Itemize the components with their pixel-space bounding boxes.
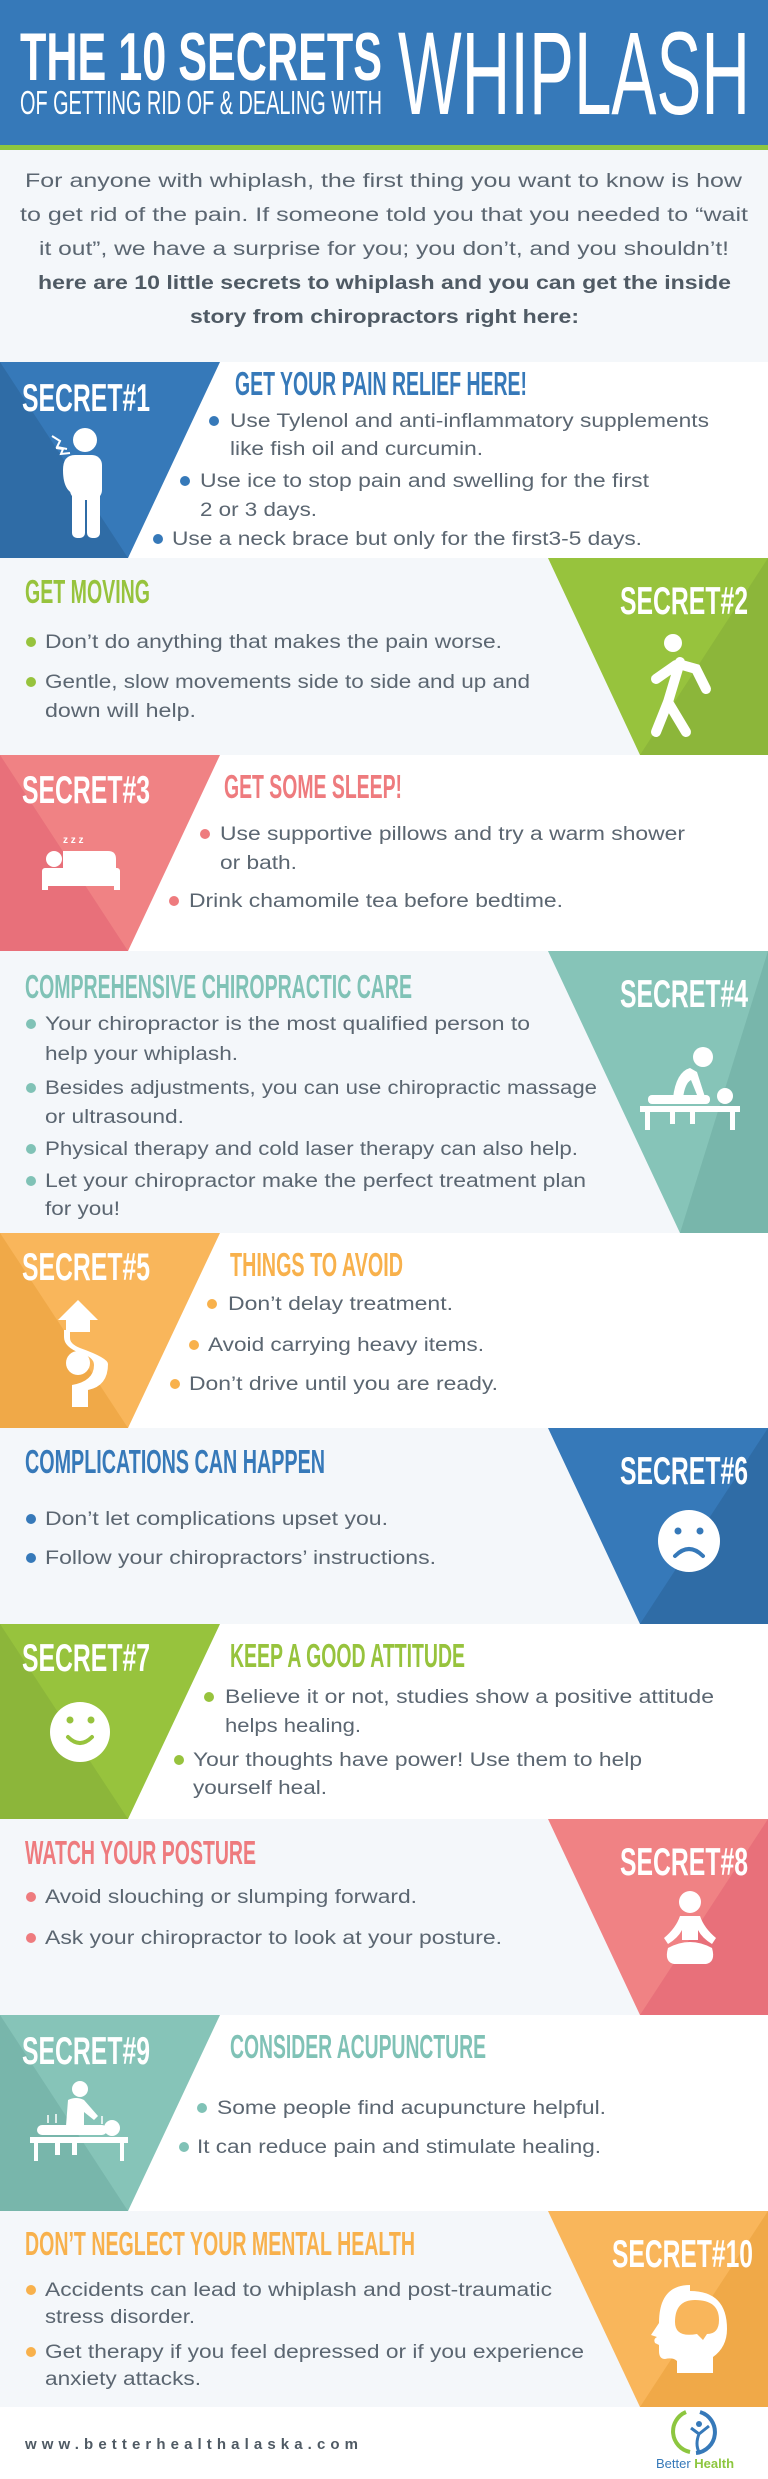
- header banner: [0, 0, 768, 150]
- icon: person with neck pain: [52, 428, 102, 538]
- panel: secret 6: [0, 1428, 768, 1624]
- panel: secret 3: [0, 755, 768, 951]
- panel: secret 1: Use a neck brace but only for the first3-5 days.: [172, 529, 642, 550]
- panel: secret 9: [0, 2015, 768, 2211]
- panel: secret 10: DON’T NEGLECT YOUR MENTAL HEALTH: [25, 2225, 415, 2262]
- panel: secret 4: Your chiropractor is the most qualified person to: [45, 1014, 530, 1035]
- intro text: story from chiropractors right here:: [190, 307, 579, 328]
- panel: secret 7: SECRET#7: [22, 1637, 150, 1680]
- icon: bed with sleeping person: z z z: [63, 835, 84, 846]
- panel: secret 9: CONSIDER ACUPUNCTURE: [230, 2028, 486, 2065]
- panel: secret 5: Don’t delay treatment.: [228, 1294, 453, 1315]
- panel: secret 9: It can reduce pain and stimulate healing.: [197, 2137, 601, 2158]
- panel: secret 3: or bath.: [220, 853, 297, 874]
- panel: secret 6: Follow your chiropractors’ instructions.: [45, 1548, 436, 1569]
- panel: secret 6: COMPLICATIONS CAN HAPPEN: [25, 1443, 325, 1480]
- intro text: here are 10 little secrets to whiplash and you can get the inside: [38, 273, 731, 294]
- panel: secret 5: [0, 1233, 768, 1428]
- panel: secret 5: SECRET#5: [22, 1246, 150, 1289]
- panel: secret 4: Physical therapy and cold laser therapy can also help.: [45, 1139, 578, 1160]
- panel: secret 9: Some people find acupuncture helpful.: [217, 2098, 606, 2119]
- panel: secret 4: or ultrasound.: [45, 1107, 184, 1128]
- icon: acupuncture: [30, 2081, 128, 2161]
- panel: secret 1: Use Tylenol and anti-inflammatory supplements: [230, 411, 709, 432]
- panel: secret 5: Avoid carrying heavy items.: [208, 1335, 484, 1356]
- panel: secret 10: anxiety attacks.: [45, 2369, 201, 2390]
- panel: secret 8: Ask your chiropractor to look at your posture.: [45, 1928, 502, 1949]
- panel: secret 4: help your whiplash.: [45, 1044, 238, 1065]
- panel: secret 4: COMPREHENSIVE CHIROPRACTIC CARE: [25, 968, 412, 1005]
- panel: secret 7: Believe it or not, studies show a positive attitude: [225, 1687, 714, 1708]
- panel: secret 7: yourself heal.: [193, 1778, 327, 1799]
- icon: head with brain: [651, 2285, 727, 2373]
- panel: secret 1: like fish oil and curcumin.: [230, 439, 483, 460]
- panel: secret 1: GET YOUR PAIN RELIEF HERE!: [235, 365, 527, 402]
- intro text: For anyone with whiplash, the first thing you want to know is how: [25, 171, 742, 192]
- panel: secret 7: Your thoughts have power! Use them to help: [193, 1750, 642, 1771]
- panel: secret 7: helps healing.: [225, 1716, 361, 1737]
- panel: secret 5: Don’t drive until you are ready.: [189, 1374, 498, 1395]
- panel: secret 8: Avoid slouching or slumping forward.: [45, 1887, 417, 1908]
- title: the 10 secrets: THE 10 SECRETS: [20, 19, 382, 95]
- panel: secret 1: [0, 362, 768, 558]
- intro text: it out”, we have a surprise for you; you don’t, and you shouldn’t!: [39, 239, 729, 260]
- icon: bed with sleeping person: [42, 835, 120, 890]
- panel: secret 10: stress disorder.: [45, 2307, 195, 2328]
- intro text: to get rid of the pain. If someone told you that you needed to “wait: [20, 205, 749, 226]
- icon: meditating person: [664, 1891, 716, 1964]
- panel: secret 2: GET MOVING: [25, 573, 150, 610]
- panel: secret 1: 2 or 3 days.: [200, 500, 317, 521]
- panel: secret 7: KEEP A GOOD ATTITUDE: [230, 1637, 465, 1674]
- panel: secret 8: WATCH YOUR POSTURE: [25, 1834, 256, 1871]
- icon: sad face: [658, 1510, 720, 1572]
- panel: secret 10: Accidents can lead to whiplash and post-traumatic: [45, 2280, 552, 2301]
- panel: secret 3: GET SOME SLEEP!: [224, 768, 402, 805]
- logo: better health: [656, 2412, 734, 2471]
- panel: secret 2: Gentle, slow movements side to side and up and: [45, 672, 530, 693]
- panel: secret 3: Use supportive pillows and try a warm shower: [220, 824, 686, 845]
- logo: better health: Better Health: [656, 2456, 734, 2471]
- icon: chiropractor treating patient: [640, 1047, 740, 1130]
- subtitle: OF GETTING RID OF & DEALING WITH: [20, 84, 382, 121]
- icon: detour arrow: [58, 1300, 108, 1407]
- panel: secret 5: THINGS TO AVOID: [230, 1246, 403, 1283]
- panel: secret 10: [0, 2211, 768, 2407]
- panel: secret 2: [0, 558, 768, 755]
- panel: secret 8: [0, 1819, 768, 2015]
- panel: secret 6: Don’t let complications upset you.: [45, 1509, 388, 1530]
- panel: secret 1: SECRET#1: [22, 377, 150, 420]
- panel: secret 4: for you!: [45, 1199, 120, 1220]
- panel: secret 1: Use ice to stop pain and swelling for the first: [200, 471, 650, 492]
- panel: secret 3: Drink chamomile tea before bedtime.: [189, 891, 563, 912]
- panel: secret 4: [0, 951, 768, 1233]
- panel: secret 9: SECRET#9: [22, 2030, 150, 2073]
- panel: secret 3: SECRET#3: [22, 769, 150, 812]
- panel: secret 2: Don’t do anything that makes the pain worse.: [45, 632, 502, 653]
- panel: secret 10: Get therapy if you feel depressed or if you experience: [45, 2342, 584, 2363]
- panel: secret 4: Let your chiropractor make the perfect treatment plan: [45, 1171, 586, 1192]
- panel: secret 7: [0, 1624, 768, 1819]
- icon: smiley face: [50, 1702, 110, 1762]
- footer url: www.betterhealthalaska.com: [24, 2436, 358, 2453]
- panel: secret 2: down will help.: [45, 701, 196, 722]
- panel: secret 4: Besides adjustments, you can use chiropractic massage: [45, 1078, 597, 1099]
- icon: walking person: [656, 634, 706, 732]
- intro text: [0, 150, 768, 362]
